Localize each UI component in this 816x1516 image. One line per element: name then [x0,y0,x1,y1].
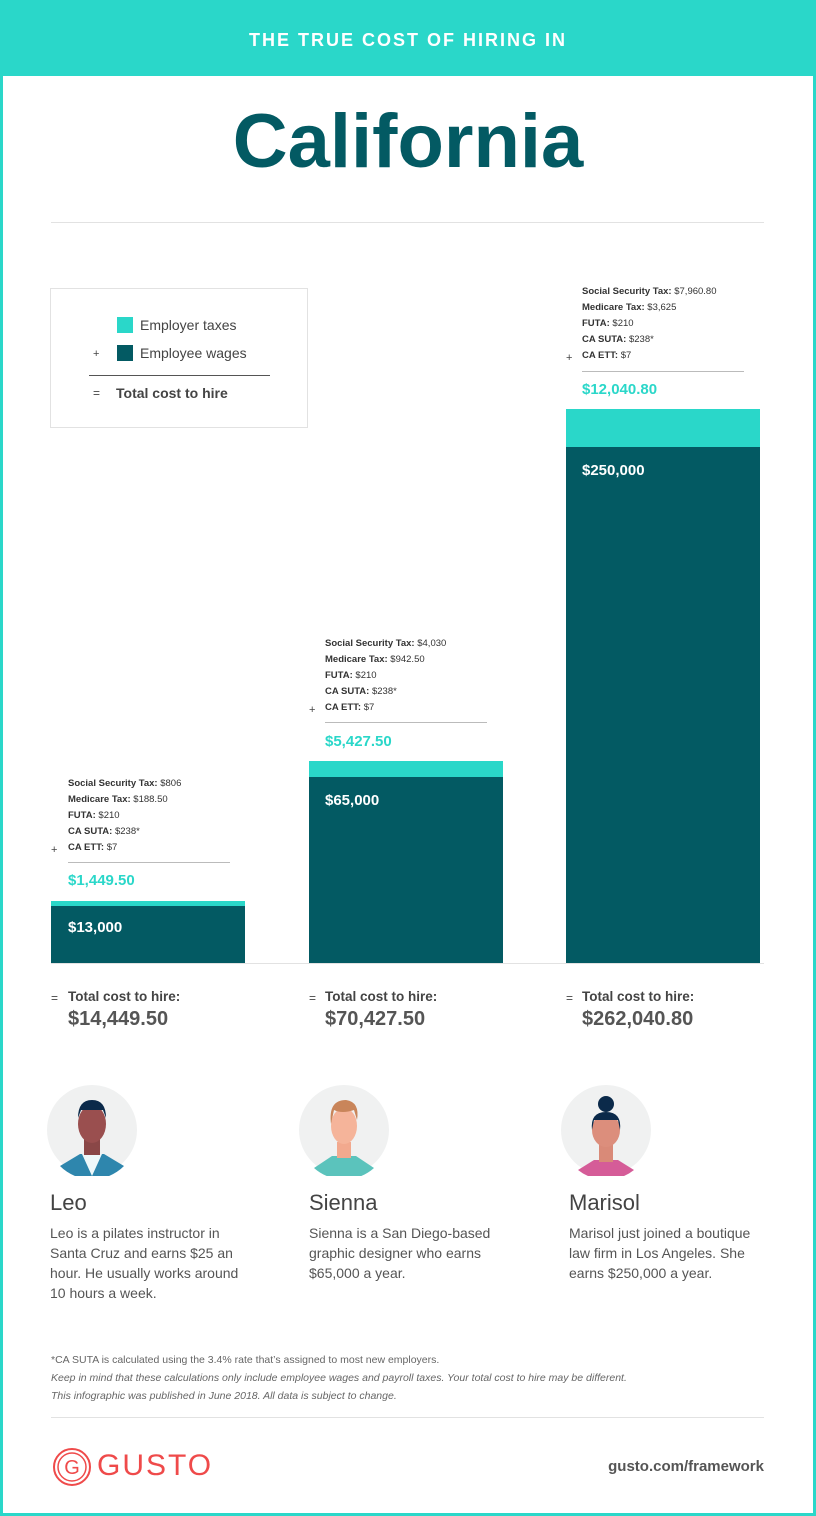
bar: Leo: FUTA: $210 [68,810,120,821]
profile: Leo [50,1190,238,1301]
bar: Sienna: $5,427.50 [325,733,392,750]
bar: Marisol: CA SUTA: $238* [582,334,654,345]
profile: Sienna [309,1190,490,1281]
chart baseline [51,963,764,964]
bar: Leo: CA SUTA: $238* [68,826,140,837]
bar: Marisol: Social Security Tax: $7,960.80 [582,286,716,297]
bar: Sienna: $65,000 [325,792,379,809]
bar: Marisol: + [566,352,572,364]
header band: THE TRUE COST OF HIRING IN [249,30,567,50]
logo: Gusto [53,1448,213,1486]
bar: Leo: $13,000 [68,919,122,936]
profile: Sienna: Sienna [309,1190,378,1215]
legend: + [93,348,99,360]
avatar: Leo [47,1085,137,1176]
profile: Marisol [569,1190,750,1281]
legend: Employee wages [140,345,247,361]
footnotes: Keep in mind that these calculations only include employee wages and payroll taxes. Your total cost to hire may be different. [51,1372,627,1384]
totals: $70,427.50 [325,1008,425,1030]
totals [51,989,694,1030]
bar: Leo [51,778,245,963]
profile: Leo: Leo [50,1190,87,1215]
bar: Leo: CA ETT: $7 [68,842,117,853]
bar: Marisol: FUTA: $210 [582,318,634,329]
avatar: Marisol [561,1085,651,1176]
url: gusto.com/framework [608,1458,764,1475]
header band [0,0,816,76]
title: California [233,99,583,184]
bar: Sienna: Medicare Tax: $942.50 [325,654,425,665]
totals: Total cost to hire: [325,989,437,1004]
avatar: Sienna [299,1085,389,1176]
totals: Total cost to hire: [68,989,180,1004]
totals: Total cost to hire: [582,989,694,1004]
logo: Gusto: GUSTO [97,1449,213,1482]
bar: Marisol: CA ETT: $7 [582,350,631,361]
totals: $14,449.50 [68,1008,168,1030]
totals: $262,040.80 [582,1008,693,1030]
legend [50,288,308,428]
bar: Sienna [309,638,503,963]
footnotes: *CA SUTA is calculated using the 3.4% rate that’s assigned to most new employers. [51,1354,439,1366]
totals: = [51,991,58,1005]
profile: Marisol: Marisol [569,1190,640,1215]
footnotes [51,1354,627,1402]
legend: Employer taxes [140,317,236,333]
logo: Gusto: G [64,1457,80,1479]
bar: Leo: $1,449.50 [68,872,135,889]
bar: Leo: + [51,844,57,856]
profile: Sienna: Sienna is a San Diego-based graphic designer who earns $65,000 a year. [309,1225,490,1281]
bar: Marisol: $12,040.80 [582,381,657,398]
bar: Leo: Medicare Tax: $188.50 [68,794,168,805]
bar: Marisol [566,286,760,963]
bar: Sienna: + [309,704,315,716]
legend: Total cost to hire [116,385,228,401]
bar: Leo: Social Security Tax: $806 [68,778,181,789]
legend: = [93,386,100,400]
bar: Sienna: CA SUTA: $238* [325,686,397,697]
footnotes: This infographic was published in June 2018. All data is subject to change. [51,1390,397,1402]
profile: Marisol: Marisol just joined a boutique law firm in Los Angeles. She earns $250,000 a year. [569,1225,750,1281]
bar: Marisol: $250,000 [582,462,645,479]
totals: = [309,991,316,1005]
bar: Sienna: FUTA: $210 [325,670,377,681]
bar: Sienna: CA ETT: $7 [325,702,374,713]
bar: Sienna: Social Security Tax: $4,030 [325,638,446,649]
profile: Leo: Leo is a pilates instructor in Santa Cruz and earns $25 an hour. He usually works around 10 hours a week. [50,1225,238,1301]
bar: Marisol: Medicare Tax: $3,625 [582,302,676,313]
totals: = [566,991,573,1005]
